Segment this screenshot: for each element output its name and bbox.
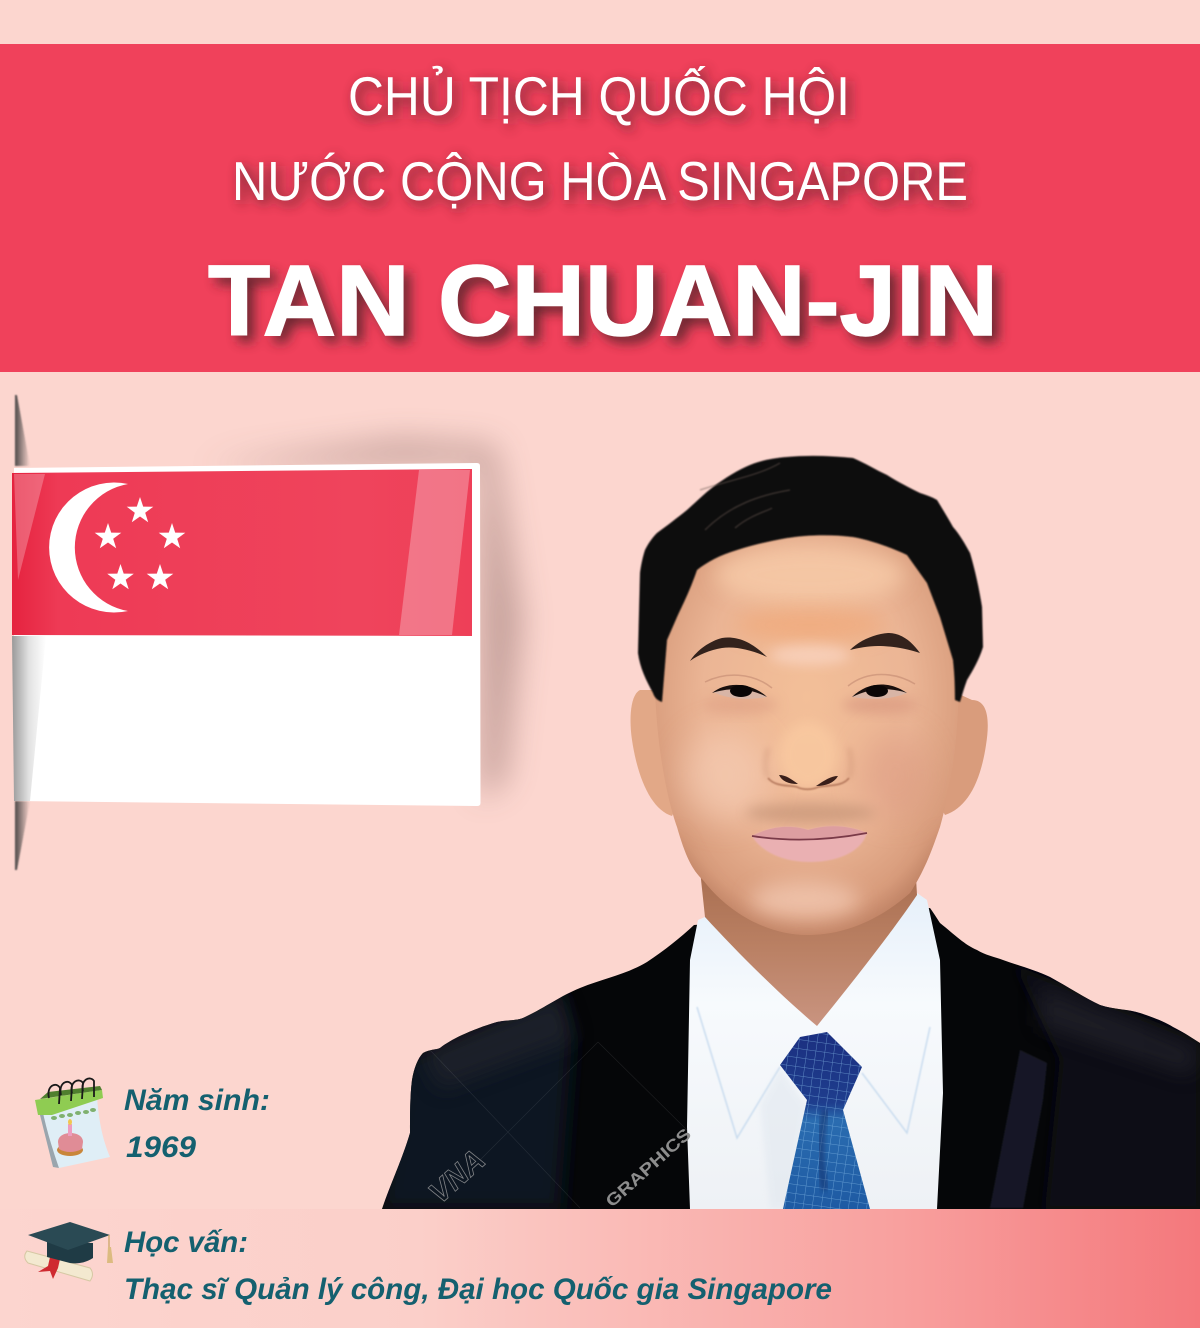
calendar header edge	[40, 1086, 102, 1099]
name: TAN CHUAN-JIN	[208, 245, 998, 357]
collar shade	[760, 1067, 806, 1209]
cap base	[47, 1242, 93, 1263]
face	[655, 525, 959, 935]
hair highlights	[700, 463, 790, 530]
tie	[780, 1032, 870, 1209]
watermarks: VNA	[423, 1143, 492, 1210]
mouth	[752, 826, 867, 862]
white sheet	[14, 463, 480, 806]
title line 2: NƯỚC CỘNG HÒA SINGAPORE	[232, 150, 968, 212]
neck	[700, 860, 917, 1026]
right eyebrow	[850, 633, 920, 653]
title shadows: TAN CHUAN-JIN	[215, 252, 1005, 364]
ribbon	[38, 1257, 60, 1279]
calendar stacked edge	[37, 1103, 59, 1168]
glare strips	[399, 470, 470, 635]
watermark graphics: GRAPHICS	[602, 1125, 695, 1211]
collar lines	[697, 1007, 930, 1138]
hair	[638, 456, 983, 702]
calendar page	[42, 1097, 110, 1168]
left eye	[705, 675, 772, 699]
education label	[124, 1226, 832, 1306]
tassel	[107, 1235, 113, 1263]
portrait	[380, 456, 1200, 1211]
calendar header	[35, 1090, 103, 1115]
shirt	[687, 893, 943, 1209]
left eyebrow	[690, 638, 767, 661]
left ear	[631, 690, 690, 816]
title line 1: CHỦ TỊCH QUỐC HỘI	[348, 65, 850, 127]
title shadows: CHỦ TỊCH QUỐC HỘI	[352, 69, 854, 131]
bottom info band	[0, 1209, 1200, 1328]
birthday cake	[57, 1119, 83, 1156]
label: Năm sinh:	[124, 1084, 270, 1117]
flag shadow	[200, 440, 522, 800]
lapel	[990, 1050, 1047, 1208]
right eye	[848, 674, 915, 699]
flag of Singapore	[12, 395, 522, 870]
fold shading	[12, 636, 46, 801]
cap board	[28, 1222, 110, 1250]
crescent	[49, 482, 128, 612]
suit	[380, 900, 1200, 1210]
nose	[765, 721, 851, 789]
watermark lines	[430, 1042, 687, 1208]
slit shadows	[15, 395, 30, 466]
value: 1969	[126, 1131, 196, 1164]
calendar rings	[48, 1078, 94, 1104]
stars	[95, 497, 185, 589]
face shading	[674, 544, 927, 924]
red stripe	[12, 469, 472, 636]
calendar dots	[51, 1108, 96, 1120]
header banner	[0, 44, 1200, 372]
title shadows: NƯỚC CỘNG HÒA SINGAPORE	[236, 154, 972, 216]
value: Thạc sĩ Quản lý công, Đại học Quốc gia Singapore	[124, 1273, 832, 1306]
diploma	[25, 1251, 92, 1281]
right ear	[925, 690, 988, 815]
icon: graduation cap and diploma	[25, 1222, 113, 1281]
title shadows	[215, 69, 1005, 364]
label: Học vấn:	[124, 1226, 248, 1259]
birth year label	[124, 1084, 270, 1164]
icon: calendar	[35, 1078, 110, 1168]
